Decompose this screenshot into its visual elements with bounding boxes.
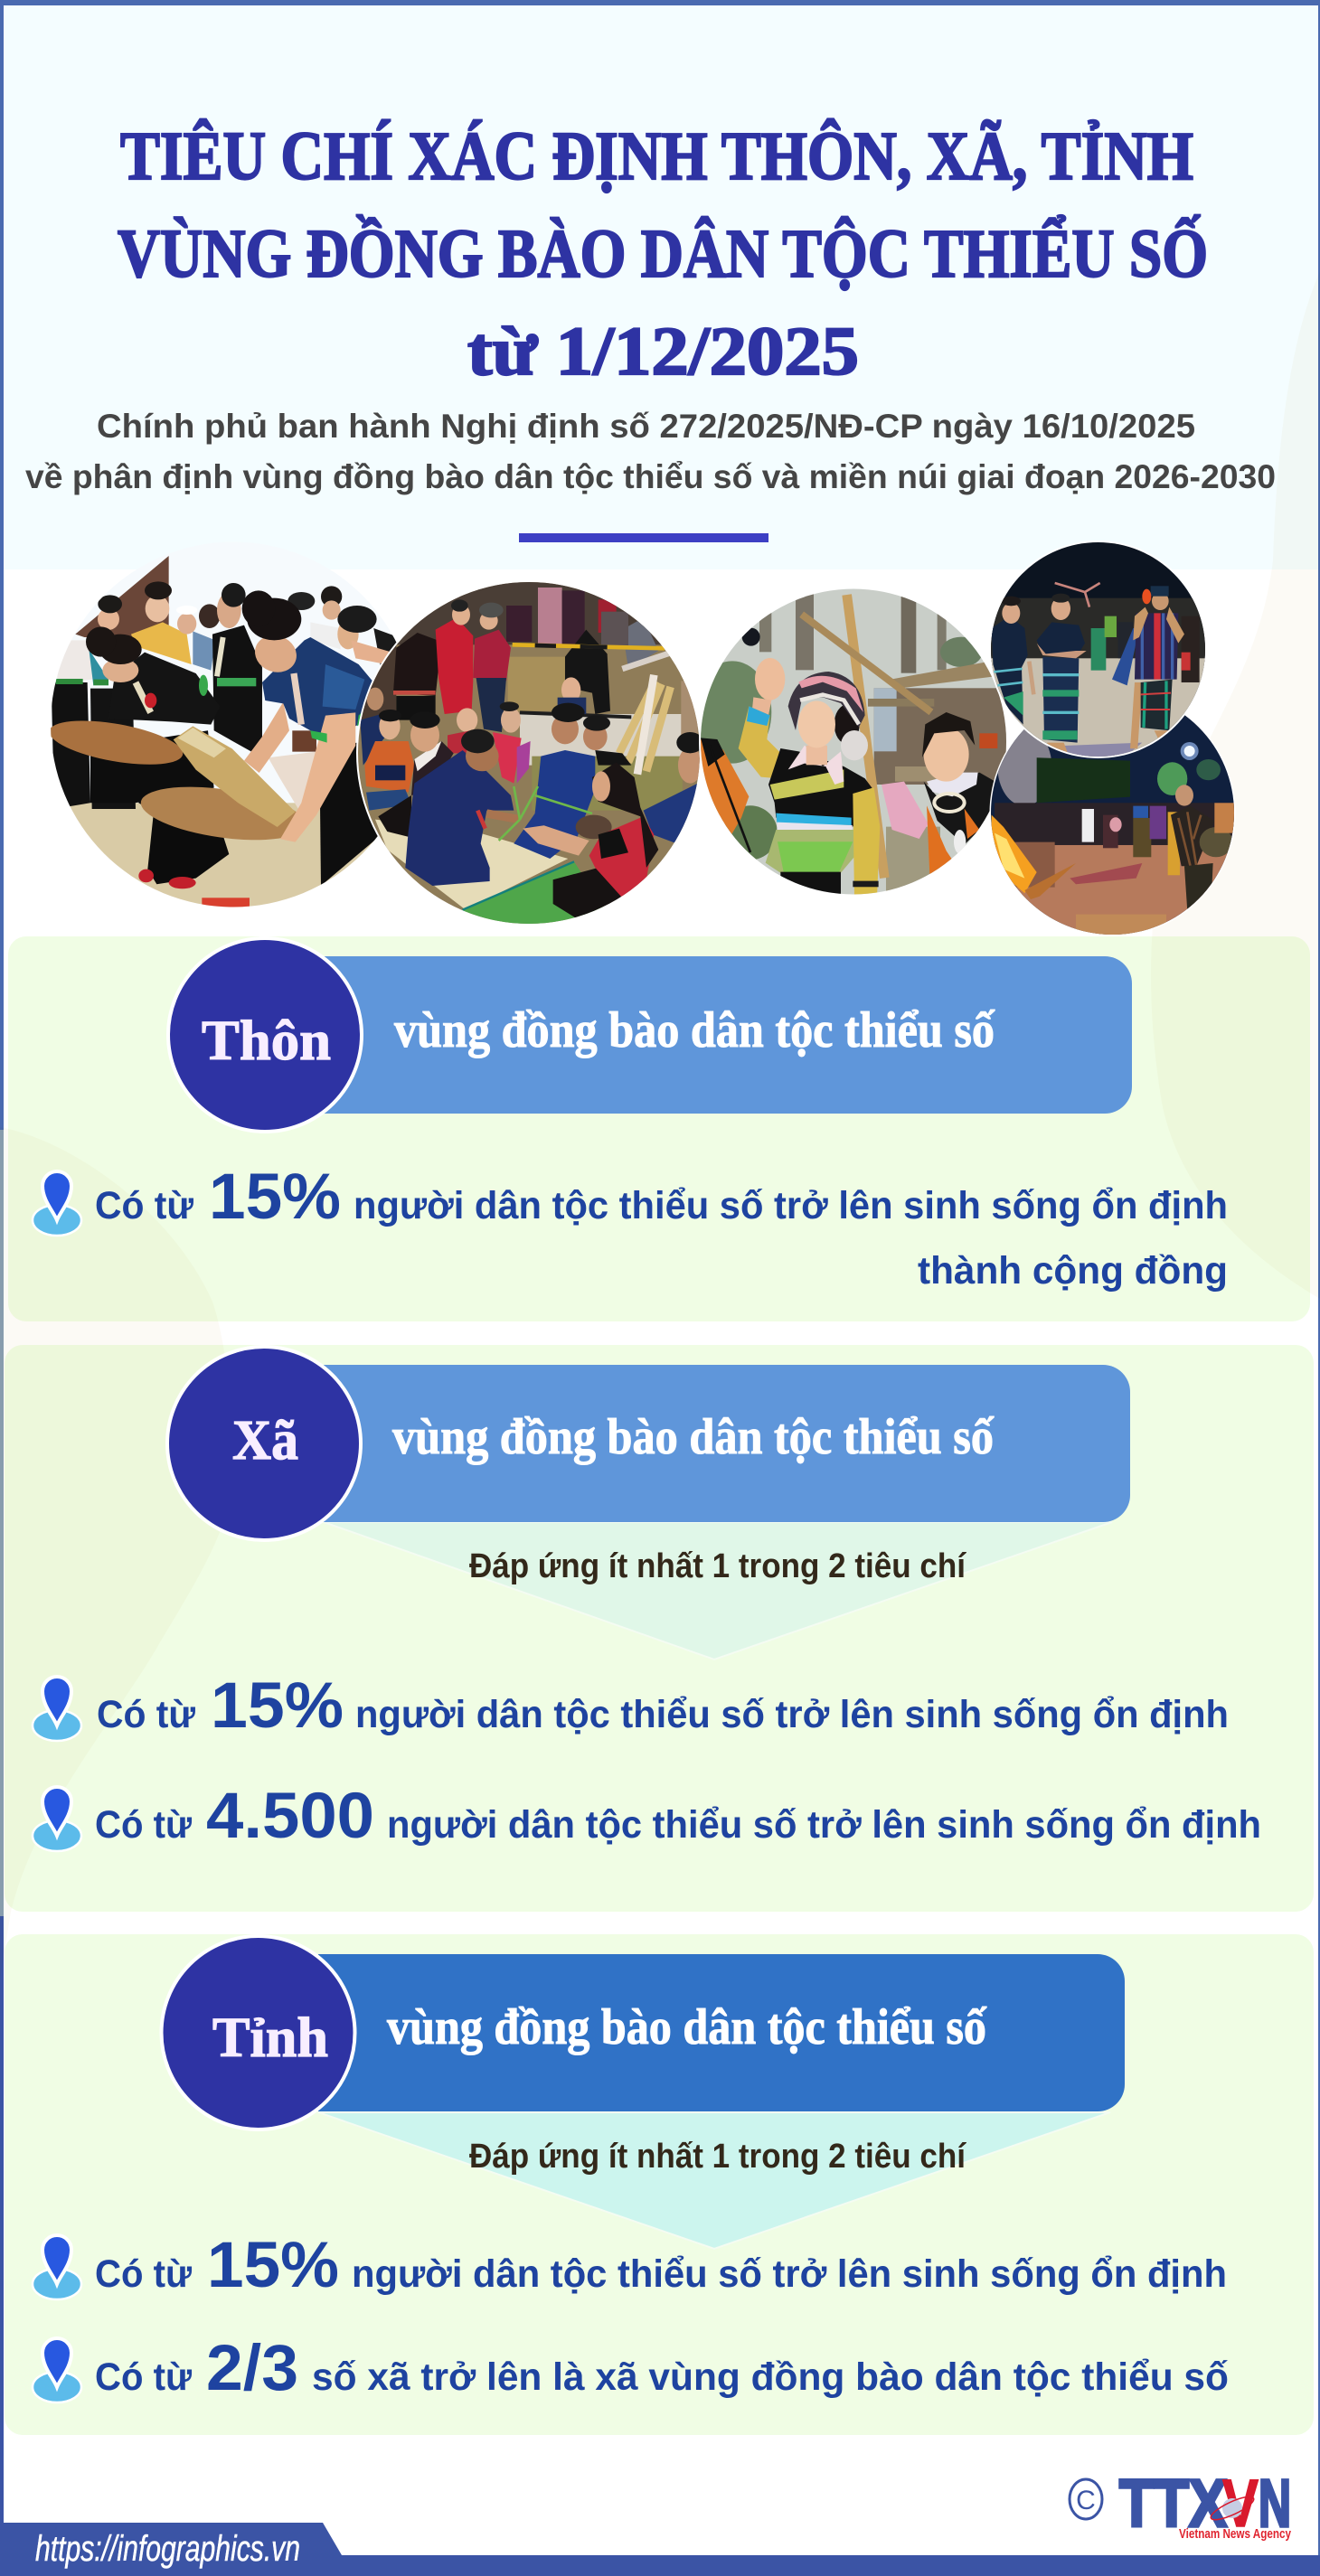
Tỉnh criterion 15%: Có từ bbox=[95, 2252, 193, 2296]
icon: location pin bbox=[33, 2338, 81, 2402]
Thôn criterion: 15% bbox=[209, 1161, 341, 1233]
Tỉnh criterion 2/3: số xã trở lên là xã vùng đồng bào dân tộc thiểu số bbox=[312, 2355, 1229, 2399]
Xã header bar bbox=[324, 1365, 1130, 1522]
Thôn criterion: người dân tộc thiểu số trở lên sinh sống ổn định bbox=[354, 1184, 1228, 1227]
Thôn header bar bbox=[324, 956, 1132, 1114]
Xã criterion 15%: 15% bbox=[211, 1670, 344, 1742]
Thôn criterion bbox=[95, 1161, 1228, 1293]
Xã label: Xã bbox=[232, 1410, 298, 1471]
Xã circle badge bbox=[167, 1347, 361, 1540]
panel: Xã background bbox=[5, 1345, 1314, 1912]
icon: location pin bbox=[33, 1677, 81, 1741]
panel: Thôn content bbox=[33, 938, 1228, 1293]
title: từ 1/12/2025 bbox=[467, 314, 859, 390]
panel: Thôn background bbox=[8, 936, 1310, 1321]
subtitle: Chính phủ ban hành Nghị định số 272/2025/NĐ-CP ngày 16/10/2025 bbox=[97, 408, 1195, 445]
subtitle: về phân định vùng đồng bào dân tộc thiểu số và miền núi giai đoạn 2026-2030 bbox=[25, 458, 1276, 495]
Tỉnh header bar bbox=[318, 1954, 1125, 2111]
title divider bar bbox=[519, 533, 768, 542]
Thôn criterion: thành cộng đồng bbox=[918, 1249, 1228, 1293]
Tỉnh label: Tỉnh bbox=[212, 2007, 328, 2069]
icon: location pin bbox=[33, 2235, 81, 2299]
Tỉnh circle badge bbox=[161, 1936, 354, 2129]
logo tagline: Vietnam News Agency bbox=[1179, 2526, 1292, 2542]
photo: Hmong women waving bbox=[693, 586, 1008, 898]
icon: location pin bbox=[33, 1171, 81, 1236]
title bbox=[118, 118, 1208, 390]
Xã criterion 15%: Có từ bbox=[97, 1693, 196, 1736]
photo: kneeling villagers ceremony bbox=[356, 578, 705, 926]
Tỉnh criterion 2/3 bbox=[95, 2333, 1229, 2404]
panel: Xã content bbox=[33, 1347, 1261, 1852]
subtitle bbox=[25, 408, 1276, 495]
icon: location pin bbox=[33, 1787, 81, 1851]
logo: TTXVN bbox=[1070, 2466, 1292, 2542]
Xã header text: vùng đồng bào dân tộc thiểu số bbox=[392, 1409, 995, 1465]
Tỉnh header text: vùng đồng bào dân tộc thiểu số bbox=[387, 1999, 987, 2055]
photo: festival dancers with stripes bbox=[991, 541, 1205, 758]
Tỉnh requirement note: Đáp ứng ít nhất 1 trong 2 tiêu chí bbox=[469, 2138, 966, 2176]
Xã funnel triangle bbox=[324, 1522, 1112, 1659]
photo: night festival bonfire bbox=[989, 715, 1235, 935]
Xã criterion 4.500: Có từ bbox=[95, 1803, 193, 1847]
Xã criterion 4.500 bbox=[95, 1781, 1261, 1852]
Tỉnh criterion 2/3: Có từ bbox=[95, 2355, 193, 2399]
Tỉnh criterion 15%: 15% bbox=[207, 2230, 339, 2301]
Xã criterion 15% bbox=[97, 1670, 1229, 1742]
Xã requirement note: Đáp ứng ít nhất 1 trong 2 tiêu chí bbox=[469, 1547, 966, 1585]
Thôn criterion: Có từ bbox=[95, 1184, 194, 1227]
icon: copyright mark bbox=[1070, 2479, 1102, 2519]
panel: Tỉnh content bbox=[33, 1936, 1229, 2404]
logo globe bbox=[1208, 2493, 1257, 2524]
Thôn label: Thôn bbox=[202, 1011, 331, 1072]
panel: Tỉnh background bbox=[5, 1934, 1314, 2435]
Xã criterion 4.500: người dân tộc thiểu số trở lên sinh sống ổn định bbox=[387, 1803, 1261, 1847]
Thôn circle badge bbox=[168, 938, 362, 1132]
footer website link: https://infographics.vn bbox=[35, 2529, 300, 2569]
logo lettering: V bbox=[1222, 2466, 1259, 2541]
icon: copyright mark: C bbox=[1076, 2486, 1096, 2515]
Tỉnh funnel triangle bbox=[318, 2112, 1110, 2249]
footer band bbox=[0, 2523, 1320, 2576]
photo: women winnowing rice bbox=[51, 556, 396, 907]
logo lettering: TTX bbox=[1119, 2466, 1227, 2541]
logo lettering: N bbox=[1259, 2466, 1291, 2541]
Xã criterion 4.500: 4.500 bbox=[206, 1781, 374, 1852]
Xã criterion 15%: người dân tộc thiểu số trở lên sinh sống ổn định bbox=[355, 1693, 1229, 1736]
Thôn header text: vùng đồng bào dân tộc thiểu số bbox=[394, 1002, 995, 1058]
Tỉnh criterion 2/3: 2/3 bbox=[206, 2333, 298, 2404]
Tỉnh criterion 15%: người dân tộc thiểu số trở lên sinh sống ổn định bbox=[352, 2252, 1227, 2296]
Tỉnh criterion 15% bbox=[95, 2230, 1227, 2301]
